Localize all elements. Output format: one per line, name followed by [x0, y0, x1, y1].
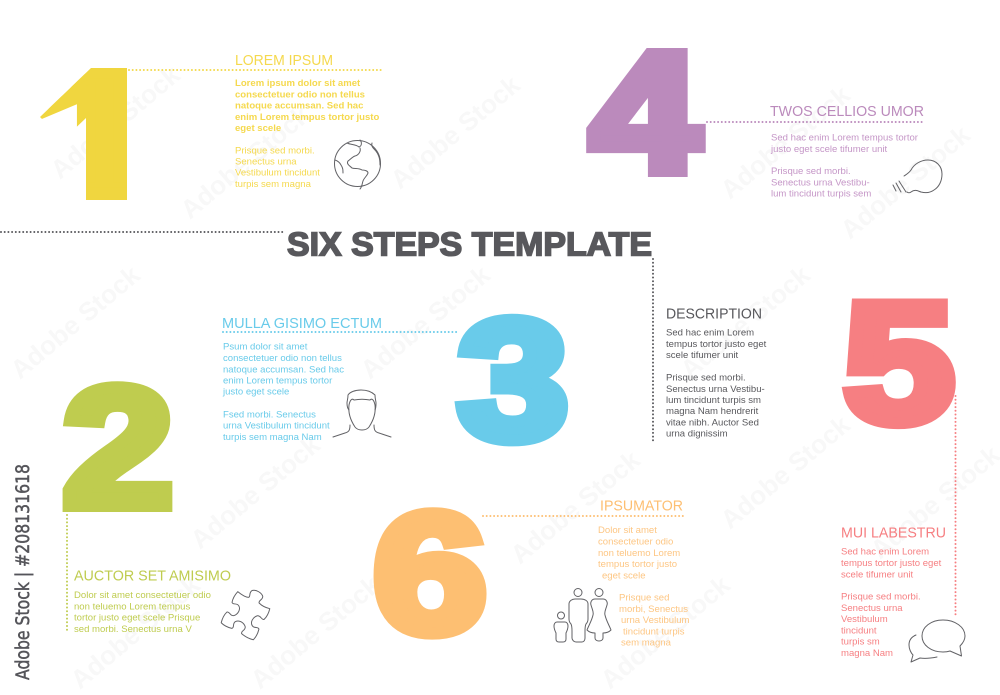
number 4: 4	[590, 18, 700, 208]
text block: step 5	[841, 546, 942, 659]
text block: step 2: non teluemo Lorem tempus	[74, 602, 190, 612]
icon: globe	[334, 140, 380, 189]
heading: lorem ipsum: LOREM IPSUM	[235, 53, 333, 69]
text block: step 6: Prisque sed	[619, 592, 669, 604]
text block: step 3: natoque accumsan. Sed hac	[223, 364, 344, 376]
text block: step 4: Sed hac enim Lorem tempus tortor	[771, 132, 919, 144]
text block: step 1: turpis sem magna	[235, 179, 312, 190]
text block: step 3: enim Lorem tempus tortor	[223, 376, 333, 386]
text block: step 6: tincidunt turpis	[623, 626, 685, 638]
text block: description: Sed hac enim Lorem	[666, 328, 754, 338]
heading: auctor set amisimo: AUCTOR SET AMISIMO	[74, 568, 231, 584]
text block: description: scele tifumer unit	[666, 350, 739, 361]
text block: step 3	[222, 342, 344, 443]
panel: step 5	[841, 269, 965, 662]
icon: puzzle piece	[220, 583, 275, 641]
text block: step 1: Senectus urna	[235, 156, 297, 168]
watermark pattern: Adobe Stock	[5, 259, 146, 385]
text block: description: vitae nibh. Auctor Sed	[666, 418, 759, 428]
text block: step 2	[74, 590, 211, 635]
watermark pattern: Adobe Stock	[245, 569, 386, 695]
text block: step 4: Prisque sed morbi.	[771, 166, 851, 177]
heading: description: DESCRIPTION	[666, 306, 762, 322]
text block: step 4: justo eget scele tifumer unit	[770, 144, 888, 155]
number 5: 5	[844, 269, 954, 458]
text block: step 6: tempus tortor justo	[598, 559, 677, 570]
text block: step 4: lum tincidunt turpis sem	[771, 188, 871, 200]
watermark pattern: Adobe Stock	[175, 99, 316, 225]
icon: light bulb	[893, 160, 942, 193]
text block: step 6: eget scele	[602, 570, 646, 582]
text block: step 2: Dolor sit amet consectetuer odio	[74, 590, 211, 601]
text block: step 6: sem magna	[621, 638, 672, 648]
watermark pattern: Adobe Stock	[835, 119, 976, 245]
text block: description: tempus tortor justo eget	[666, 339, 767, 350]
panel: step 6	[373, 478, 690, 668]
text block: step 3: Fsed morbi. Senectus	[223, 410, 316, 420]
text block: step 2: sed morbi. Senectus urna V	[74, 624, 192, 635]
text block: step 5: Prisque sed morbi.	[841, 592, 921, 602]
text block: step 1	[235, 78, 379, 190]
text block: step 1: Lorem ipsum dolor sit amet	[235, 78, 361, 89]
text block: step 6: non teluemo Lorem	[598, 548, 680, 559]
panel: step 3	[222, 286, 568, 475]
watermark pattern: Adobe Stock	[65, 569, 206, 695]
text block: step 6: consectetuer odio	[598, 536, 673, 548]
text block: description: lum tincidunt turpis sm	[666, 395, 761, 406]
text block: step 1: consectetuer odio non tellus	[235, 90, 365, 100]
heading: ipsumator: IPSUMATOR	[600, 498, 683, 514]
text block: step 5: magna Nam	[841, 648, 893, 659]
watermark pattern: Adobe Stock	[385, 69, 526, 195]
text block: step 5: tincidunt	[841, 626, 877, 636]
text block: step 1: natoque accumsan. Sed hac	[235, 100, 364, 112]
icon: speech bubbles	[909, 620, 965, 662]
text block: description: Prisque sed morbi.	[666, 372, 746, 384]
text block: step 5: turpis sm	[841, 636, 880, 648]
heading: mui labestru: MUI LABESTRU	[841, 526, 946, 542]
watermark pattern: Adobe Stock	[715, 409, 856, 535]
text block: step 6: Dolor sit amet	[598, 525, 657, 536]
text block: step 1: Prisque sed morbi.	[235, 146, 315, 156]
text block: step 5: Vestibulum	[841, 614, 888, 625]
watermark pattern: Adobe Stock	[675, 259, 816, 385]
number 1: 1	[25, 34, 171, 232]
text block: step 1: eget scele	[235, 123, 281, 134]
text block: step 5: scele tifumer unit	[841, 570, 914, 580]
text block: step 2: tortor justo eget scele Prisque	[74, 612, 200, 624]
heading: mulla gisimo ectum: MULLA GISIMO ECTUM	[222, 316, 382, 332]
text block: step 1: Vestibulum tincidunt	[235, 168, 320, 178]
text block: step 3: urna Vestibulum tincidunt	[223, 420, 330, 432]
text block: step 3: Psum dolor sit amet	[223, 342, 308, 352]
text block: step 1: enim Lorem tempus tortor justo	[235, 112, 379, 123]
number 6: 6	[373, 478, 487, 668]
text block: step 3: turpis sem magna Nam	[223, 432, 322, 443]
watermark pattern: Adobe Stock	[595, 569, 736, 695]
watermark pattern: Adobe Stock	[45, 59, 186, 185]
watermark pattern: Adobe Stock	[715, 79, 856, 205]
text block: description	[666, 328, 767, 440]
number 3: 3	[458, 286, 568, 475]
heading: twos cellios umor: TWOS CELLIOS UMOR	[770, 104, 924, 120]
panel: step 2	[63, 353, 275, 641]
text block: description: Senectus urna Vestibu-	[666, 384, 765, 395]
text block: description: urna dignissim	[666, 428, 728, 440]
text block: step 6: morbi, Senectus	[619, 604, 688, 615]
text block: step 6: urna Vestibulum	[621, 615, 690, 626]
panel: step 4	[590, 18, 942, 208]
stock credit: Adobe Stock | #208131618	[13, 464, 34, 680]
watermark pattern: Adobe Stock	[505, 444, 646, 570]
text block: step 5: Sed hac enim Lorem	[841, 546, 929, 558]
icon: family	[554, 588, 611, 642]
number 2: 2	[63, 353, 173, 543]
text block: step 3: consectetuer odio non tellus	[223, 353, 342, 364]
icon: person head	[333, 390, 391, 437]
text block: step 4	[770, 132, 919, 200]
text block: step 3: justo eget scele	[222, 386, 289, 398]
watermark pattern: Adobe Stock	[355, 259, 496, 385]
panel: description	[653, 259, 767, 443]
title: SIX STEPS TEMPLATE	[287, 226, 652, 262]
text block: step 5: Senectus urna	[841, 603, 903, 614]
panel: step 1	[40, 55, 382, 200]
text block: description: magna Nam hendrerit	[666, 406, 759, 417]
text block: step 6	[598, 525, 690, 648]
text block: step 5: tempus tortor justo eget	[841, 558, 942, 569]
text block: step 4: Senectus urna Vestibu-	[771, 178, 870, 188]
watermark pattern: Adobe Stock	[185, 429, 326, 555]
